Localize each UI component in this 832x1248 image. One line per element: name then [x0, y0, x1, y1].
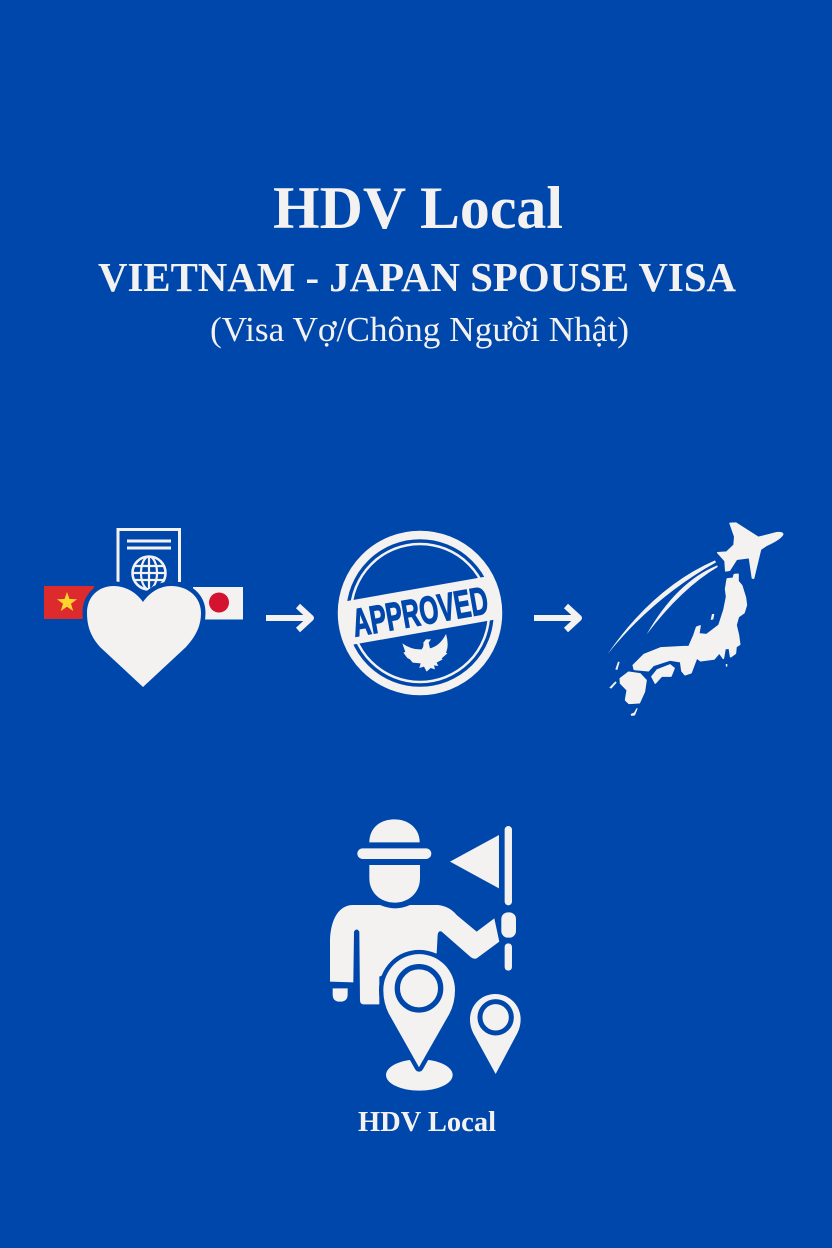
guide body: [330, 905, 499, 1004]
icon: spouse heart with flags and passport: [44, 530, 243, 687]
icon: airplane: [718, 523, 783, 578]
pennant: [450, 835, 499, 888]
title: HDV Local: [273, 175, 563, 241]
icon: local guide with pins: [330, 819, 521, 1091]
icon: plane over japan map: [608, 523, 783, 716]
guide hat: [357, 819, 431, 859]
contrails: [608, 560, 718, 654]
large map pin: [383, 954, 455, 1067]
small map pin: [470, 994, 521, 1074]
subtitle: VIETNAM - JAPAN SPOUSE VISA: [98, 254, 736, 300]
guide head: [369, 865, 420, 903]
stamp band: [340, 575, 500, 646]
icon: heart: [87, 586, 201, 687]
japan small islands: [609, 614, 727, 716]
title block: [98, 175, 736, 349]
icon: japan flag: [193, 587, 243, 620]
icon: eagle: [402, 634, 448, 672]
icon: passport document: [118, 530, 180, 582]
flag pole: [501, 826, 516, 971]
map base: [386, 1059, 453, 1091]
icon: globe: [129, 553, 169, 593]
arrow: to japan: [534, 606, 579, 630]
japan map: [620, 574, 746, 703]
vietnamese subtitle: (Visa Vợ/Chông Người Nhật): [210, 310, 629, 349]
stamp text: APPROVED: [349, 579, 491, 646]
guide cuff: [333, 988, 348, 1002]
arrow: to approved stamp: [266, 606, 311, 630]
stamp rings: [342, 535, 498, 691]
icon: vietnam flag: [44, 586, 94, 619]
guide label: HDV Local: [358, 1107, 496, 1138]
icon: approved stamp: [340, 535, 500, 691]
